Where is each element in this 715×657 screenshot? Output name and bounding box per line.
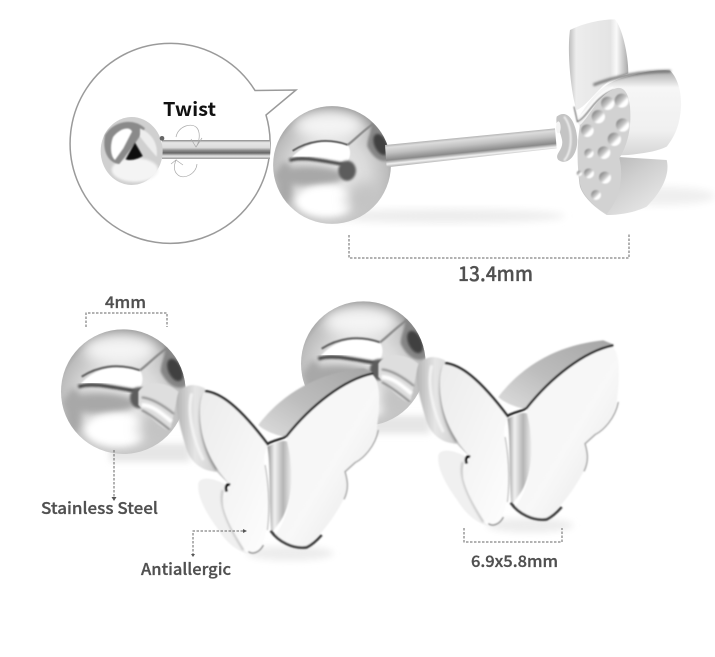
label: Stainless Steel: Stainless Steel bbox=[41, 495, 158, 519]
rhinestone dots bbox=[577, 94, 629, 200]
bubble outline bbox=[70, 43, 296, 243]
callout: stainless steel bbox=[41, 450, 158, 519]
collar bbox=[556, 114, 577, 162]
twist arrows bbox=[171, 125, 202, 177]
label: Antiallergic: Antiallergic bbox=[141, 556, 231, 580]
callout: twist detail bubble bbox=[70, 43, 296, 243]
product photo: side view of the earring bbox=[273, 19, 715, 224]
label: Twist: Twist bbox=[163, 95, 216, 122]
sphere: large ball bbox=[273, 106, 391, 224]
label: 6.9x5.8mm: 6.9x5.8mm bbox=[471, 548, 558, 572]
product photo: rear earring bbox=[301, 301, 619, 533]
butterfly: front upper lobe bbox=[577, 70, 681, 157]
shaft bbox=[385, 128, 557, 167]
earring stem and butterfly back bbox=[385, 19, 681, 215]
label: 13.4mm: 13.4mm bbox=[458, 258, 533, 287]
butterfly: front lower lobe bbox=[579, 153, 667, 215]
butterfly: rear wing bbox=[569, 19, 628, 110]
callout: antiallergic bbox=[141, 529, 247, 580]
dotted back panel bbox=[578, 88, 630, 214]
product photo: front earring bbox=[61, 329, 379, 561]
bar in bubble bbox=[162, 140, 270, 159]
label: 4mm: 4mm bbox=[105, 289, 146, 313]
dimension: butterfly size bbox=[464, 528, 562, 572]
small sphere bbox=[101, 117, 164, 185]
dimension: ball diameter bbox=[86, 289, 167, 327]
dimension: total length bbox=[349, 234, 629, 287]
